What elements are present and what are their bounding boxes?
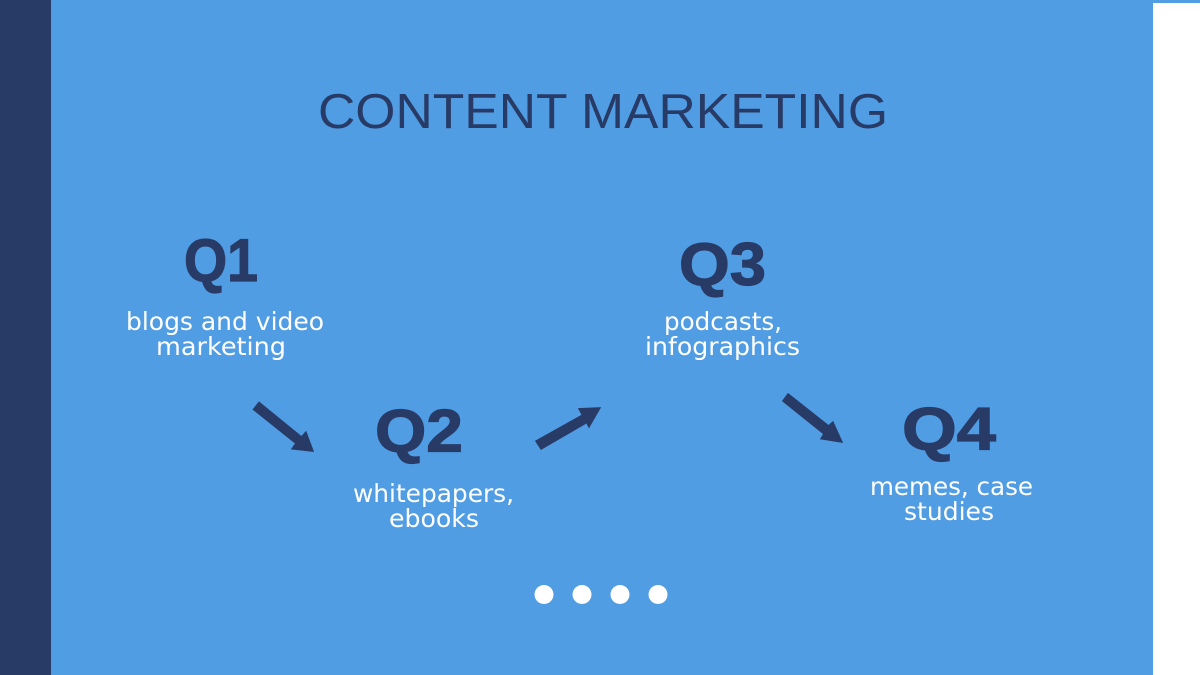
text: Q2 description: ebooks <box>389 504 479 533</box>
block: Q1 <box>126 227 324 361</box>
text: Q2 description: whitepapers, <box>353 479 514 508</box>
panel: navy left sidebar <box>0 0 51 675</box>
text: Q4 description: memes, case <box>870 472 1033 501</box>
text: Q1 description: blogs and video <box>126 307 324 336</box>
arrow: Q3 to Q4 <box>782 394 842 442</box>
text: Q1 description <box>126 307 324 361</box>
text: Q3 description: infographics <box>645 332 800 361</box>
block: Q3 <box>645 231 800 361</box>
block: Q2 <box>353 398 514 533</box>
text: Q2 description <box>353 479 514 533</box>
text: Q4 description <box>870 472 1033 526</box>
heading: Q2: Q2 <box>375 398 463 464</box>
title: CONTENT MARKETING <box>318 85 888 139</box>
arrow: Q1 to Q2 <box>253 402 314 452</box>
panel: white right margin <box>1153 3 1200 675</box>
text: Q4 description: studies <box>904 497 994 526</box>
arrow: Q2 to Q3 <box>536 408 600 450</box>
block: Q4 <box>870 396 1033 526</box>
text: Q3 description: podcasts, <box>664 307 782 336</box>
text: Q1 description: marketing <box>156 332 286 361</box>
pagination dots <box>534 585 668 604</box>
heading: Q4: Q4 <box>902 396 997 462</box>
heading: Q1: Q1 <box>184 227 258 294</box>
text: Q3 description <box>645 307 800 361</box>
heading: Q3: Q3 <box>679 231 766 298</box>
